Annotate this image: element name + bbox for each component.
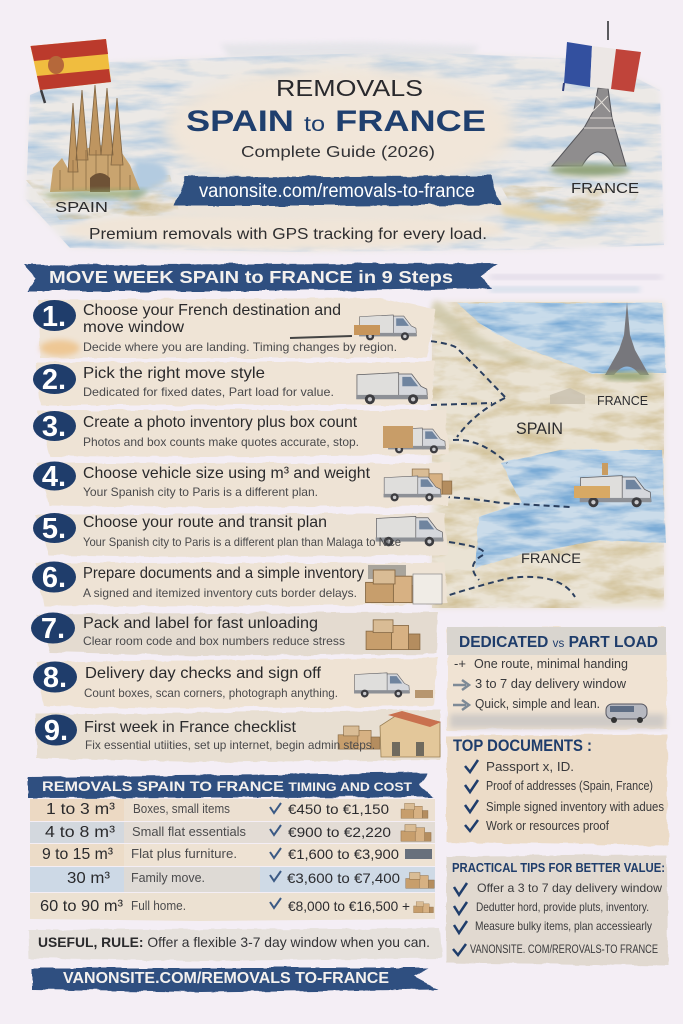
- step note: Decide where you are landing. Timing changes by region.: [83, 340, 397, 354]
- step 8: [33, 658, 438, 708]
- number badge: [33, 411, 76, 443]
- sea: south: [475, 450, 666, 568]
- step note: Photos and box counts make quotes accurate, stop.: [83, 435, 359, 449]
- step 9: [35, 710, 441, 762]
- step 7: [31, 612, 438, 656]
- number badge: 2.: [42, 364, 66, 396]
- tips list: Dedutter hord, provide pluts, inventory.: [476, 900, 649, 914]
- icon: van: [290, 315, 416, 340]
- panel heading: TOP DOCUMENTS :: [453, 737, 592, 755]
- row: 60 to 90 m3: [30, 893, 435, 921]
- comparison text: one route: One route, minimal handing: [474, 656, 628, 671]
- icon: Eiffel Tower: [550, 21, 630, 176]
- step 3: [33, 410, 448, 457]
- label: France north: FRANCE: [597, 393, 648, 408]
- arrow: [453, 680, 469, 690]
- row: 60 to 90 m3: Full home.: [131, 899, 186, 913]
- steps ribbon heading: [24, 263, 498, 291]
- number badge: [35, 714, 77, 747]
- number badge: 9.: [44, 715, 68, 747]
- comparison point: one route: -+: [454, 656, 466, 671]
- URL banner: vanonsite.com/removals-to-france: [199, 181, 475, 202]
- row: 30 m3: Family move.: [131, 871, 205, 885]
- row: 30 m3: 30 m³: [67, 870, 111, 887]
- row: 60 to 90 m3: 60 to 90 m³: [40, 898, 124, 915]
- panel heading: PRACTICAL TIPS FOR BETTER VALUE:: [452, 861, 665, 875]
- label: France: FRANCE: [571, 180, 639, 197]
- step 4: [33, 461, 452, 507]
- step heading: Choose your French destination and: [83, 302, 341, 319]
- step note: Your Spanish city to Paris is a different plan than Malaga to Nice: [83, 535, 401, 549]
- label: Spain: SPAIN: [55, 199, 108, 216]
- URL banner: [174, 176, 501, 206]
- tips list: Measure bulky items, plan accessiearly: [475, 919, 652, 933]
- step heading: First week in France checklist: [84, 719, 297, 736]
- step 1: [33, 298, 436, 358]
- step heading: Prepare documents and a simple inventory: [83, 565, 364, 582]
- panel: dedicated vs part load: [447, 627, 667, 730]
- step note: Clear room code and box numbers reduce stress: [83, 634, 345, 648]
- footer URL ribbon: VANONSITE.COM/REMOVALS TO-FRANCE: [63, 970, 389, 987]
- row: 30 m3: [30, 867, 435, 892]
- step heading: Delivery day checks and sign off: [85, 665, 322, 682]
- step note: Count boxes, scan corners, photograph anything.: [84, 686, 338, 700]
- row: 9 to 15 m3: Flat plus furniture.: [131, 847, 237, 861]
- step heading: Pack and label for fast unloading: [83, 615, 318, 632]
- useful rule callout: USEFUL, RULE: Offer a flexible 3-7 day window when you can.: [38, 934, 430, 950]
- number badge: [33, 662, 77, 694]
- row: 1 to 3 m3: [30, 799, 435, 821]
- footer URL ribbon: [32, 968, 438, 992]
- comparison text: delivery window: 3 to 7 day delivery window: [475, 676, 627, 691]
- number badge: 5.: [42, 513, 66, 545]
- steps ribbon heading: MOVE WEEK SPAIN to FRANCE in 9 Steps: [49, 267, 453, 287]
- icon: Sagrada Familia: [40, 85, 150, 198]
- number badge: 6.: [42, 562, 66, 594]
- route map panel: [421, 300, 666, 608]
- icon: French flag: [563, 42, 641, 92]
- step heading: [83, 302, 341, 336]
- step heading: Choose your route and transit plan: [83, 514, 327, 531]
- tips list: [453, 881, 662, 956]
- row: 30 m3: €3,600 to €7,400: [287, 870, 400, 886]
- icon: van with boxes: [384, 469, 452, 501]
- number badge: 8.: [43, 662, 67, 694]
- icon: small car: [606, 704, 647, 723]
- step heading: Choose vehicle size using m³ and weight: [83, 465, 371, 482]
- step note: A signed and itemized inventory cuts border delays.: [83, 586, 357, 600]
- checklist: [465, 759, 664, 833]
- row: 1 to 3 m3: €450 to €1,150: [288, 801, 389, 817]
- row: 60 to 90 m3: €8,000 to €16,500 +: [288, 898, 410, 914]
- number badge: [33, 300, 76, 333]
- checklist: Work or resources proof: [486, 818, 609, 833]
- step heading: move window: [83, 319, 184, 336]
- number badge: [32, 562, 76, 594]
- icon: delivery van: [354, 673, 433, 698]
- panel heading: DEDICATED vs PART LOAD: [459, 634, 658, 651]
- step note: Fix essential utiities, set up internet, begin admin steps.: [85, 738, 375, 752]
- number badge: 4.: [42, 461, 66, 493]
- row: 4 to 8 m3: Small flat essentials: [132, 825, 246, 839]
- row: 1 to 3 m3: 1 to 3 m³: [46, 801, 116, 818]
- row: 4 to 8 m3: €900 to €2,220: [288, 824, 391, 840]
- number badge: [33, 513, 76, 545]
- number badge: [33, 364, 76, 396]
- comparison text: quick: Quick, simple and lean.: [475, 696, 600, 711]
- icon: French house: [338, 711, 441, 757]
- row: 9 to 15 m3: 9 to 15 m³: [42, 846, 114, 863]
- row: 4 to 8 m3: [30, 822, 435, 843]
- title block: [186, 75, 486, 161]
- header watercolor landscape: [26, 42, 664, 292]
- row: 9 to 15 m3: [30, 844, 435, 866]
- subtitle: Complete Guide (2026): [241, 144, 435, 161]
- label: Spain: SPAIN: [516, 419, 563, 438]
- icon: Spanish flag: [30, 39, 111, 103]
- row: 9 to 15 m3: €1,600 to €3,900: [288, 846, 399, 862]
- number badge: 7.: [41, 613, 65, 645]
- timing and cost ribbon: REMOVALS SPAIN TO FRANCE TIMING AND COST: [42, 779, 412, 794]
- step 2: [33, 362, 435, 405]
- tagline: Premium removals with GPS tracking for every load.: [89, 226, 487, 243]
- tips list: Offer a 3 to 7 day delivery window: [477, 881, 662, 895]
- sea: north: [457, 303, 666, 373]
- icon: boxes and paperwork: [366, 565, 442, 604]
- number badge: 1.: [42, 301, 66, 333]
- step 5: [33, 513, 448, 557]
- title: Spain to France: SPAIN to FRANCE: [186, 105, 486, 138]
- checklist: Passport x, ID.: [486, 759, 574, 774]
- timing and cost ribbon: [28, 773, 434, 798]
- number badge: [33, 461, 76, 493]
- useful rule callout: [29, 928, 442, 961]
- row: 4 to 8 m3: 4 to 8 m³: [45, 824, 116, 841]
- label: France south: FRANCE: [521, 550, 581, 566]
- panel: practical tips: [446, 855, 668, 966]
- panel: top documents: [447, 734, 668, 846]
- step heading: Pick the right move style: [83, 365, 265, 382]
- row: 1 to 3 m3: Boxes, small items: [133, 802, 230, 816]
- step 6: [32, 562, 448, 606]
- number badge: [31, 612, 75, 645]
- icon: van with cargo: [383, 426, 446, 453]
- cost table: [30, 799, 435, 921]
- step note: Dedicated for fixed dates, Part load for value.: [83, 385, 334, 399]
- coast band: [430, 300, 590, 375]
- number badge: 3.: [42, 411, 66, 443]
- dashed route: [421, 340, 575, 598]
- icon: van: [376, 516, 443, 546]
- step heading: Create a photo inventory plus box count: [83, 414, 358, 431]
- icon: van: [356, 373, 428, 404]
- icon: packed boxes: [366, 620, 420, 650]
- icon: town: [550, 388, 585, 404]
- title: removals: REMOVALS: [276, 75, 423, 101]
- step note: Your Spanish city to Paris is a different plan.: [83, 485, 318, 499]
- icon: large van on sea: [574, 463, 651, 507]
- arrow: [453, 700, 469, 710]
- checklist: Proof of addresses (Spain, France): [486, 778, 653, 793]
- icon: small Eiffel Tower: [602, 302, 654, 380]
